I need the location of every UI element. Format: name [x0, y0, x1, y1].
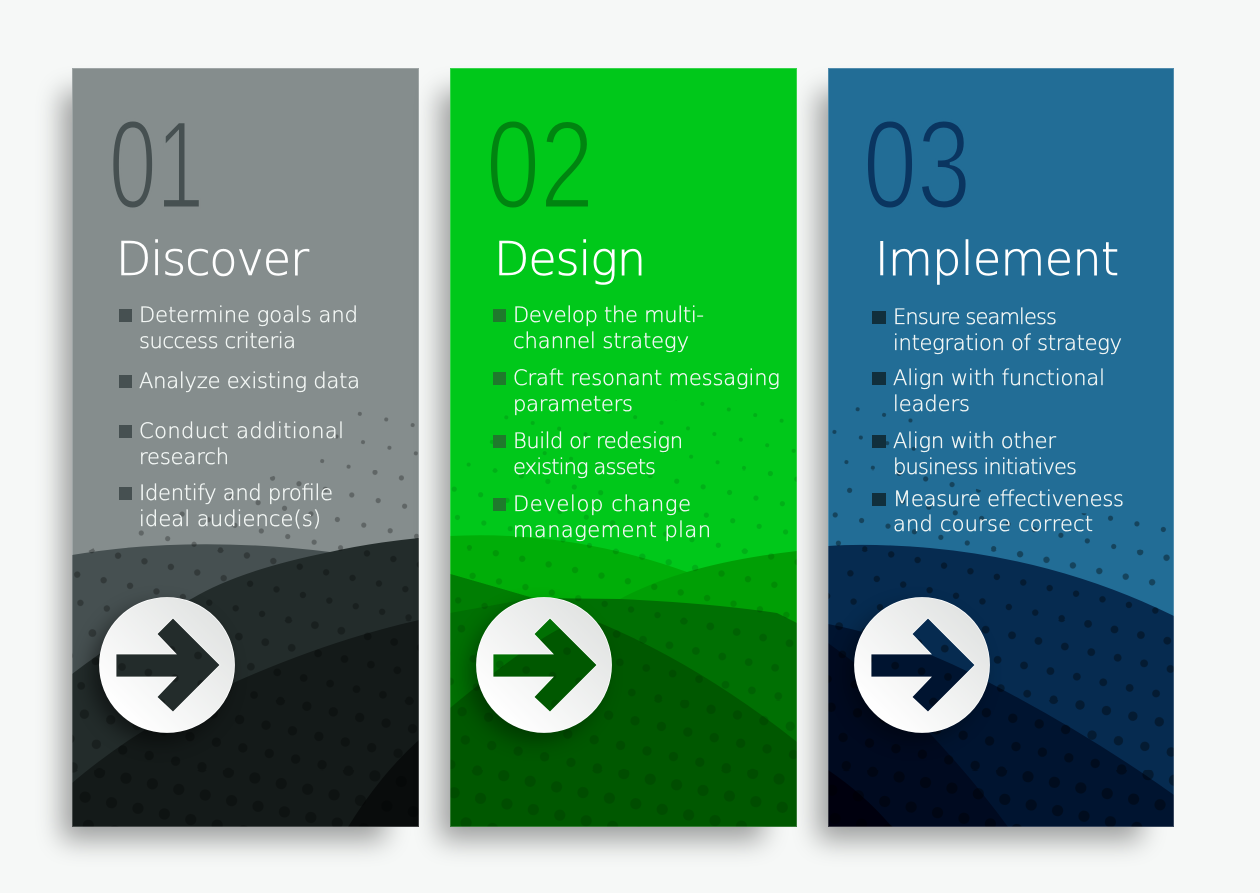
bullet list: Design: Build or redesign [513, 429, 683, 453]
heading: Design: Design [494, 232, 646, 286]
bullet list: Implement [872, 305, 1124, 536]
bullet list: Implement: Measure effectiveness [893, 487, 1124, 511]
bullet list: Implement: business initiatives [893, 455, 1077, 479]
number 03: 03 [863, 96, 971, 235]
bullet list: Design: Develop the multi- [513, 303, 704, 327]
bullet list: Implement: leaders [893, 392, 970, 416]
bullet list: Implement: and course correct [893, 512, 1093, 536]
bullet list: Discover [119, 303, 360, 531]
panel: 02 Design [440, 68, 797, 840]
bullet list: Design: parameters [513, 392, 633, 416]
bullet list: Discover: research [139, 445, 229, 469]
heading: Implement: Implement [875, 232, 1119, 286]
bullet list: Discover: Conduct additional [139, 419, 344, 443]
bullet list: Design: Craft resonant messaging [513, 366, 780, 390]
bullet list: Implement: Ensure seamless [893, 305, 1057, 329]
bullet list: Discover: Analyze existing data [139, 369, 360, 393]
bullet list: Design: Develop change [513, 492, 691, 516]
bullet list: Implement: Align with other [893, 429, 1056, 453]
bullet list: Design: existing assets [513, 455, 656, 479]
bullet list: Design: management plan [513, 518, 711, 542]
bullet list: Discover: ideal audience(s) [139, 507, 321, 531]
icon: arrow circle [92, 598, 234, 741]
panel: 01 Discover [62, 68, 419, 840]
number 01: 01 [109, 96, 204, 235]
bullet list: Discover: success criteria [139, 329, 296, 353]
bullet list: Implement: Align with functional [893, 366, 1105, 390]
number 02: 02 [486, 96, 594, 235]
icon: arrow circle [847, 598, 990, 741]
heading: Discover: Discover [116, 232, 309, 286]
bullet list: Design [493, 303, 780, 542]
bullet list: Discover: Determine goals and [139, 303, 358, 327]
bullet list: Implement: integration of strategy [893, 331, 1122, 355]
icon: arrow circle [469, 598, 612, 741]
bullet list: Design: channel strategy [513, 329, 689, 353]
bullet list: Discover: Identify and profile [139, 481, 333, 505]
panel: 03 Implement [818, 68, 1174, 840]
